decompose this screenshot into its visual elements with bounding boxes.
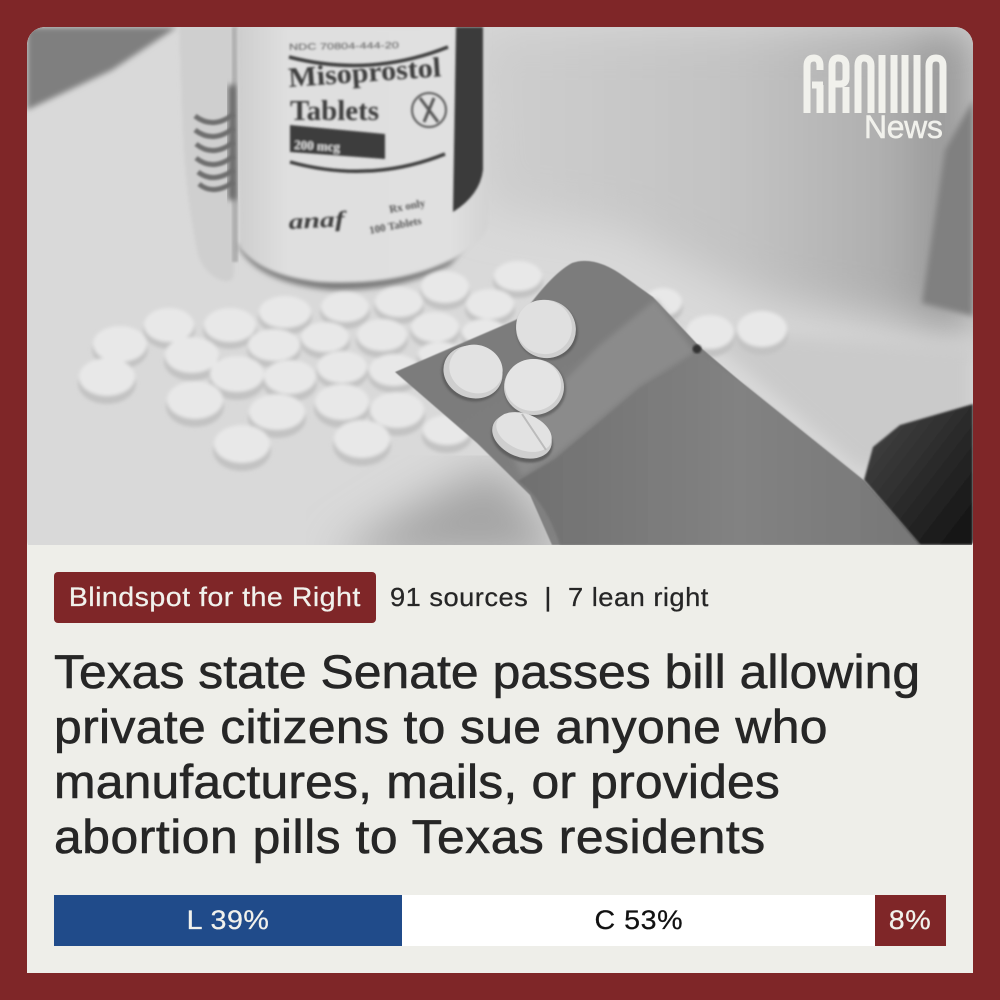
center segment: C 53%	[594, 905, 683, 935]
bottle: 200 mcg	[294, 137, 341, 154]
right segment	[875, 895, 946, 946]
bottle label text: NDC 70804-444-20	[289, 40, 399, 52]
right segment: 8%	[889, 905, 932, 935]
logo subtitle: News	[864, 109, 942, 145]
pills in envelope	[441, 300, 578, 464]
bottle	[237, 27, 488, 290]
source counts: 91 sources | 7 lean right	[390, 582, 709, 612]
headline: Texas state Senate passes bill allowing	[54, 645, 920, 698]
bottle: Misoprostol	[287, 52, 442, 94]
headline: abortion pills to Texas residents	[54, 810, 766, 863]
left segment	[54, 895, 402, 946]
blindspot badge: Blindspot for the Right	[69, 582, 361, 612]
bottle: 100 Tablets	[368, 215, 423, 237]
logo: Ground News	[807, 55, 943, 145]
blurred pills on cloth	[78, 261, 788, 471]
bottle cap edge	[179, 27, 238, 281]
photo: misoprostol bottle and pills	[27, 27, 973, 545]
headline: private citizens to sue anyone who	[54, 700, 828, 753]
bottle: Tablets	[290, 96, 379, 127]
envelope holding pills	[395, 261, 920, 545]
left segment: L 39%	[187, 905, 269, 935]
headline	[54, 645, 920, 864]
center segment	[402, 895, 875, 946]
headline: manufactures, mails, or provides	[54, 755, 780, 808]
blindspot badge	[54, 572, 376, 623]
background cloth	[27, 27, 973, 560]
bottle: Rx only	[388, 197, 427, 216]
logo wordmark letters	[807, 55, 943, 113]
glove at right	[864, 404, 973, 545]
bottle: anaf	[288, 206, 349, 234]
bias bar	[54, 895, 946, 946]
